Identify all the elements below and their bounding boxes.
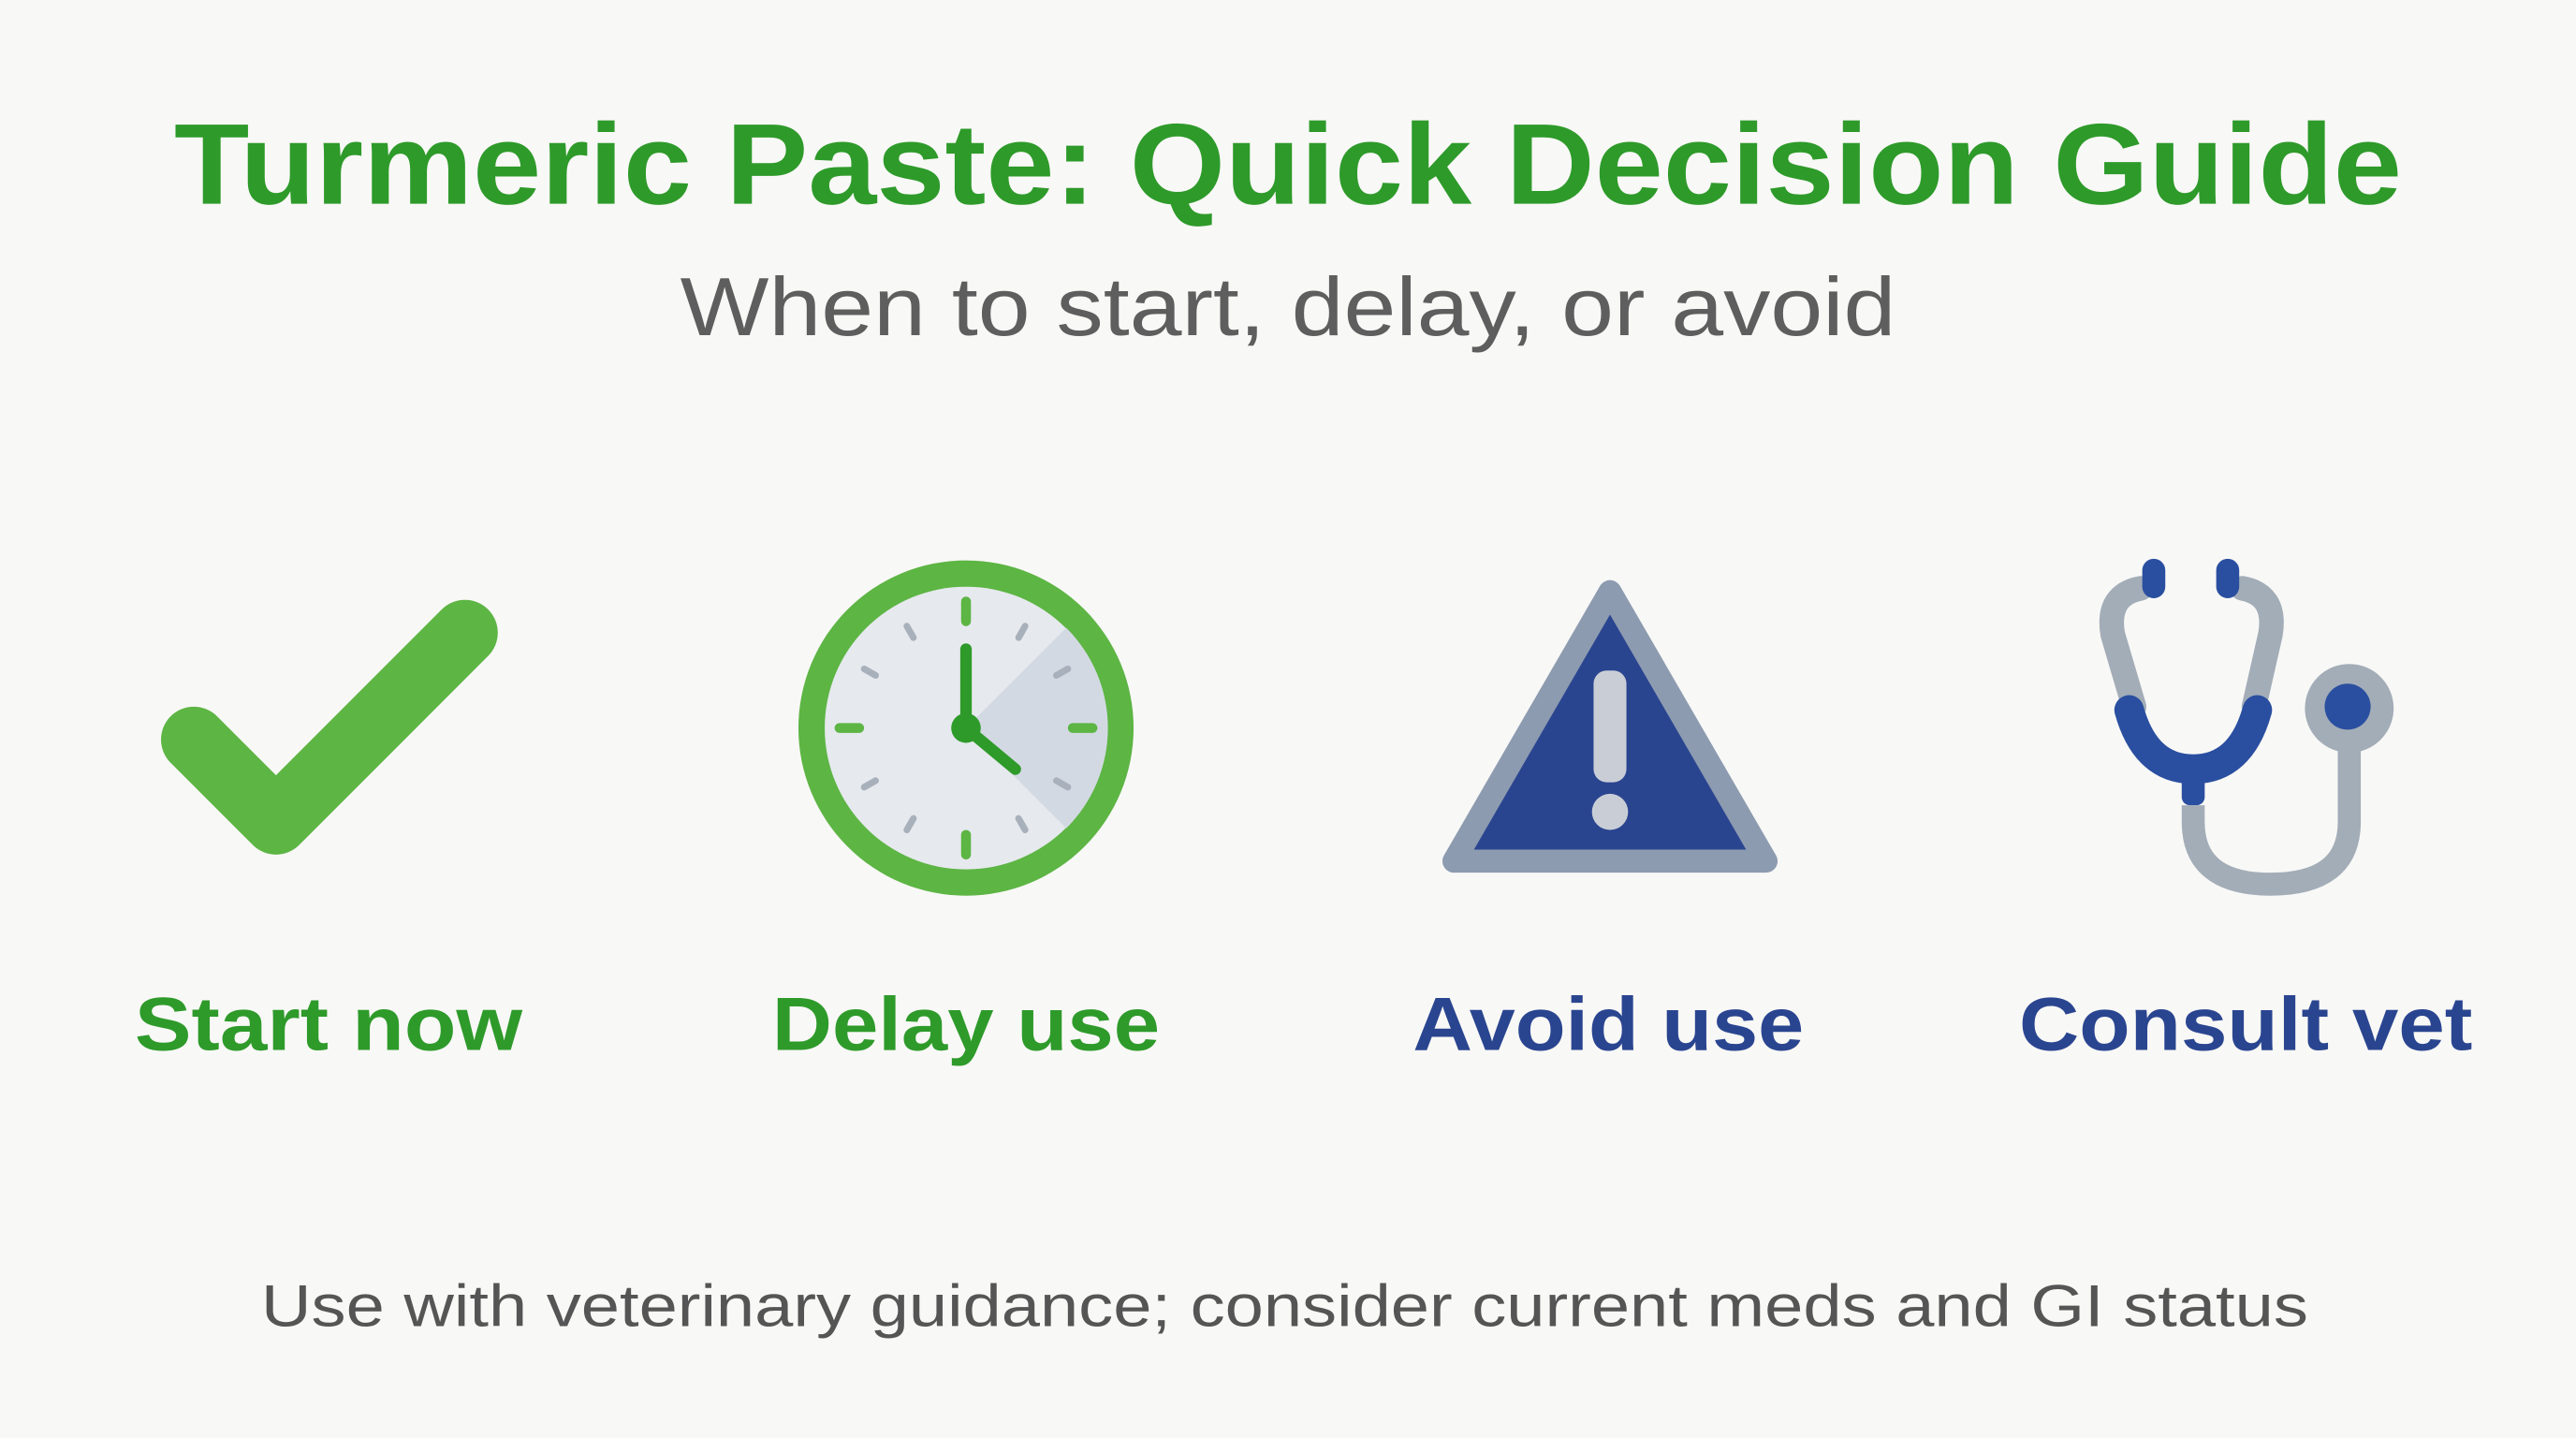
footer note: Use with veterinary guidance; consider current meds and GI status xyxy=(261,1274,2308,1340)
icon: stethoscope xyxy=(2112,559,2393,1019)
icon: checkmark xyxy=(194,633,465,822)
icon: warning triangle xyxy=(1454,592,1766,861)
label: start now: Start now xyxy=(135,983,522,1067)
label: delay use: Delay use xyxy=(772,983,1160,1067)
label: avoid use: Avoid use xyxy=(1412,983,1804,1067)
icon: clock xyxy=(798,561,1134,896)
label: consult vet: Consult vet xyxy=(2019,983,2472,1067)
title: Turmeric Paste: Quick Decision Guide xyxy=(174,101,2402,229)
subtitle: When to start, delay, or avoid xyxy=(681,261,1895,353)
